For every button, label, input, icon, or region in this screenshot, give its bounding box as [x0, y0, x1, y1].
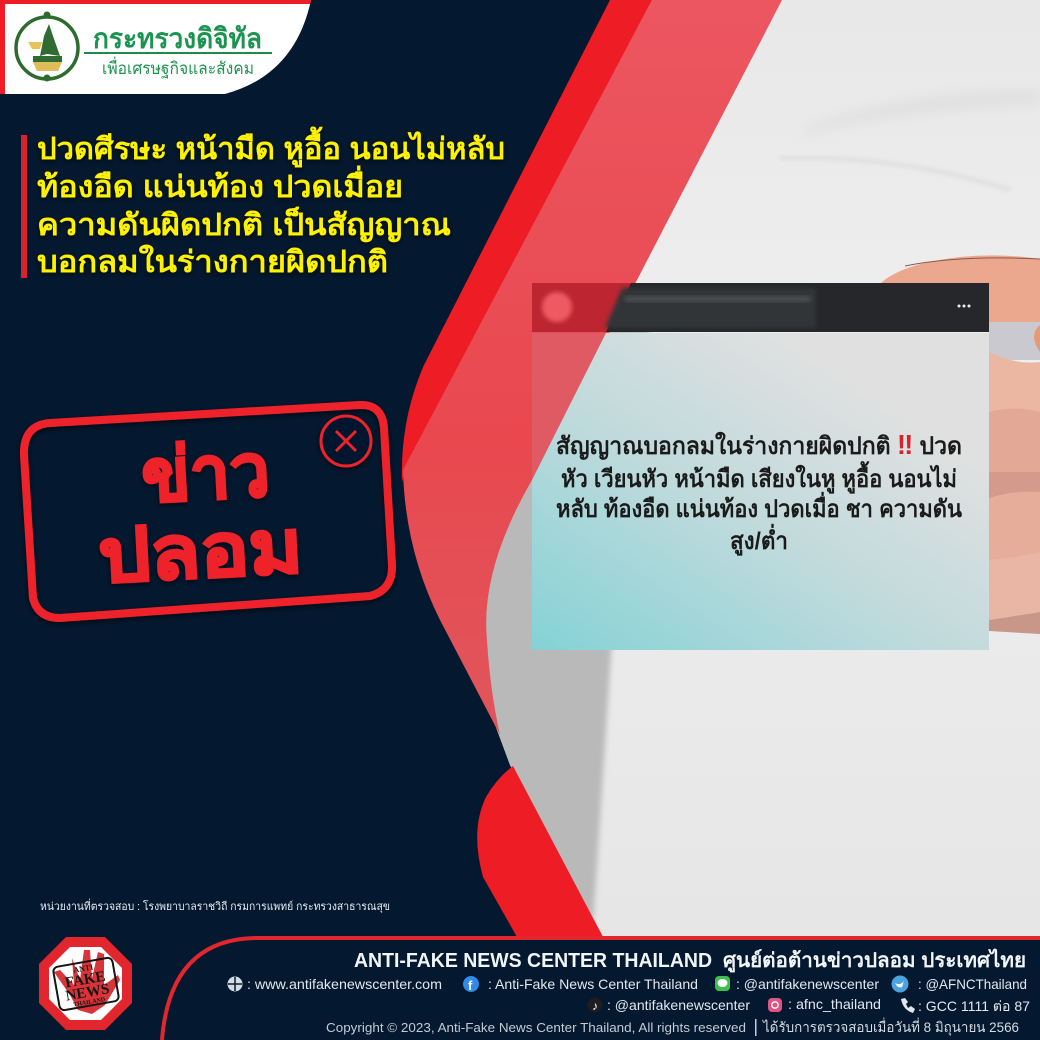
panel: social post card — [532, 283, 989, 650]
post text — [556, 429, 963, 556]
title: ปวดศีรษะ หน้ามืด หูอื้อ นอนไม่หลับ — [37, 126, 505, 168]
post text: สูง/ต่ำ — [730, 523, 788, 556]
instagram handle: : afnc_thailand — [788, 996, 881, 1012]
panel: ministry logo — [0, 0, 311, 94]
icon: cross in circle — [321, 416, 371, 466]
phone number: : GCC 1111 ต่อ 87 — [918, 998, 1030, 1014]
icon: facebook — [463, 976, 479, 993]
logo: anti fake news stop sign: THAILAND — [73, 997, 106, 1008]
logo: anti fake news stop sign: ANTI — [73, 963, 94, 975]
logo: anti fake news stop sign: FAKE — [64, 969, 107, 991]
ministry name: กระทรวงดิจิทัล — [93, 23, 262, 54]
post header bar — [532, 283, 989, 332]
footer heading: ANTI-FAKE NEWS CENTER THAILAND — [354, 950, 712, 972]
twitter handle: : @AFNCThailand — [918, 976, 1027, 992]
title: บอกลมในร่างกายผิดปกติ — [37, 244, 388, 279]
title: ความดันผิดปกติ เป็นสัญญาณ — [37, 206, 451, 243]
stamp word: ปลอม — [97, 505, 305, 598]
post text: หลับ ท้องอืด แน่นท้อง ปวดเมื่อ ชา ความดัน — [556, 491, 963, 523]
facebook handle: : Anti-Fake News Center Thailand — [488, 976, 698, 992]
icon: phone — [901, 998, 915, 1013]
line handle: : @antifakenewscenter — [736, 976, 879, 992]
post text: หัว เวียนหัว หน้ามืด เสียงในหู หูอื้อ นอนไม่ — [561, 460, 957, 494]
title accent bar — [21, 135, 27, 278]
logo: anti fake news stop sign — [39, 937, 132, 1030]
icon: twitter — [892, 976, 908, 992]
panel: footer — [162, 938, 1040, 1040]
post text: สัญญาณบอกลมในร่างกายผิดปกติ ‼ ปวด — [556, 429, 962, 460]
red ribbon: translucent band — [403, 0, 782, 735]
logo: anti fake news stop sign: NEWS — [64, 981, 111, 1005]
copyright: Copyright © 2023, Anti-Fake News Center Thailand, All rights reserved — [326, 1020, 746, 1035]
footer heading: ศูนย์ต่อต้านข่าวปลอม ประเทศไทย — [723, 948, 1026, 974]
red corner shape at bottom — [477, 766, 603, 937]
tiktok handle: : @antifakenewscenter — [607, 997, 750, 1013]
icon: facebook: f — [468, 978, 473, 993]
icon: tiktok: ♪ — [592, 999, 598, 1013]
review date: ได้รับการตรวจสอบเมื่อวันที่ 8 มิถุนายน 2566 — [762, 1018, 1019, 1036]
title: ท้องอืด แน่นท้อง ปวดเมื่อย — [37, 165, 403, 204]
photo: man in white shirt holding stomach — [486, 0, 1040, 936]
icon: web — [228, 976, 242, 992]
hand mark — [54, 950, 120, 1014]
ministry tagline: เพื่อเศรษฐกิจและสังคม — [102, 56, 254, 79]
icon: tiktok — [588, 998, 602, 1013]
red ribbon: solid band — [402, 0, 652, 482]
icon: ministry emblem — [16, 12, 78, 82]
stamp: fake news — [24, 405, 392, 618]
title — [37, 126, 505, 279]
icon: instagram — [768, 998, 782, 1012]
stamp word: ข่าว — [140, 428, 272, 518]
icon: more options — [958, 304, 970, 308]
verifying agency note: หน่วยงานที่ตรวจสอบ : โรงพยาบาลราชวิถี กรมการแพทย์ กระทรวงสาธารณสุข — [40, 898, 390, 913]
website: : www.antifakenewscenter.com — [247, 976, 442, 992]
icon: line — [715, 976, 730, 991]
hand — [880, 255, 1040, 634]
